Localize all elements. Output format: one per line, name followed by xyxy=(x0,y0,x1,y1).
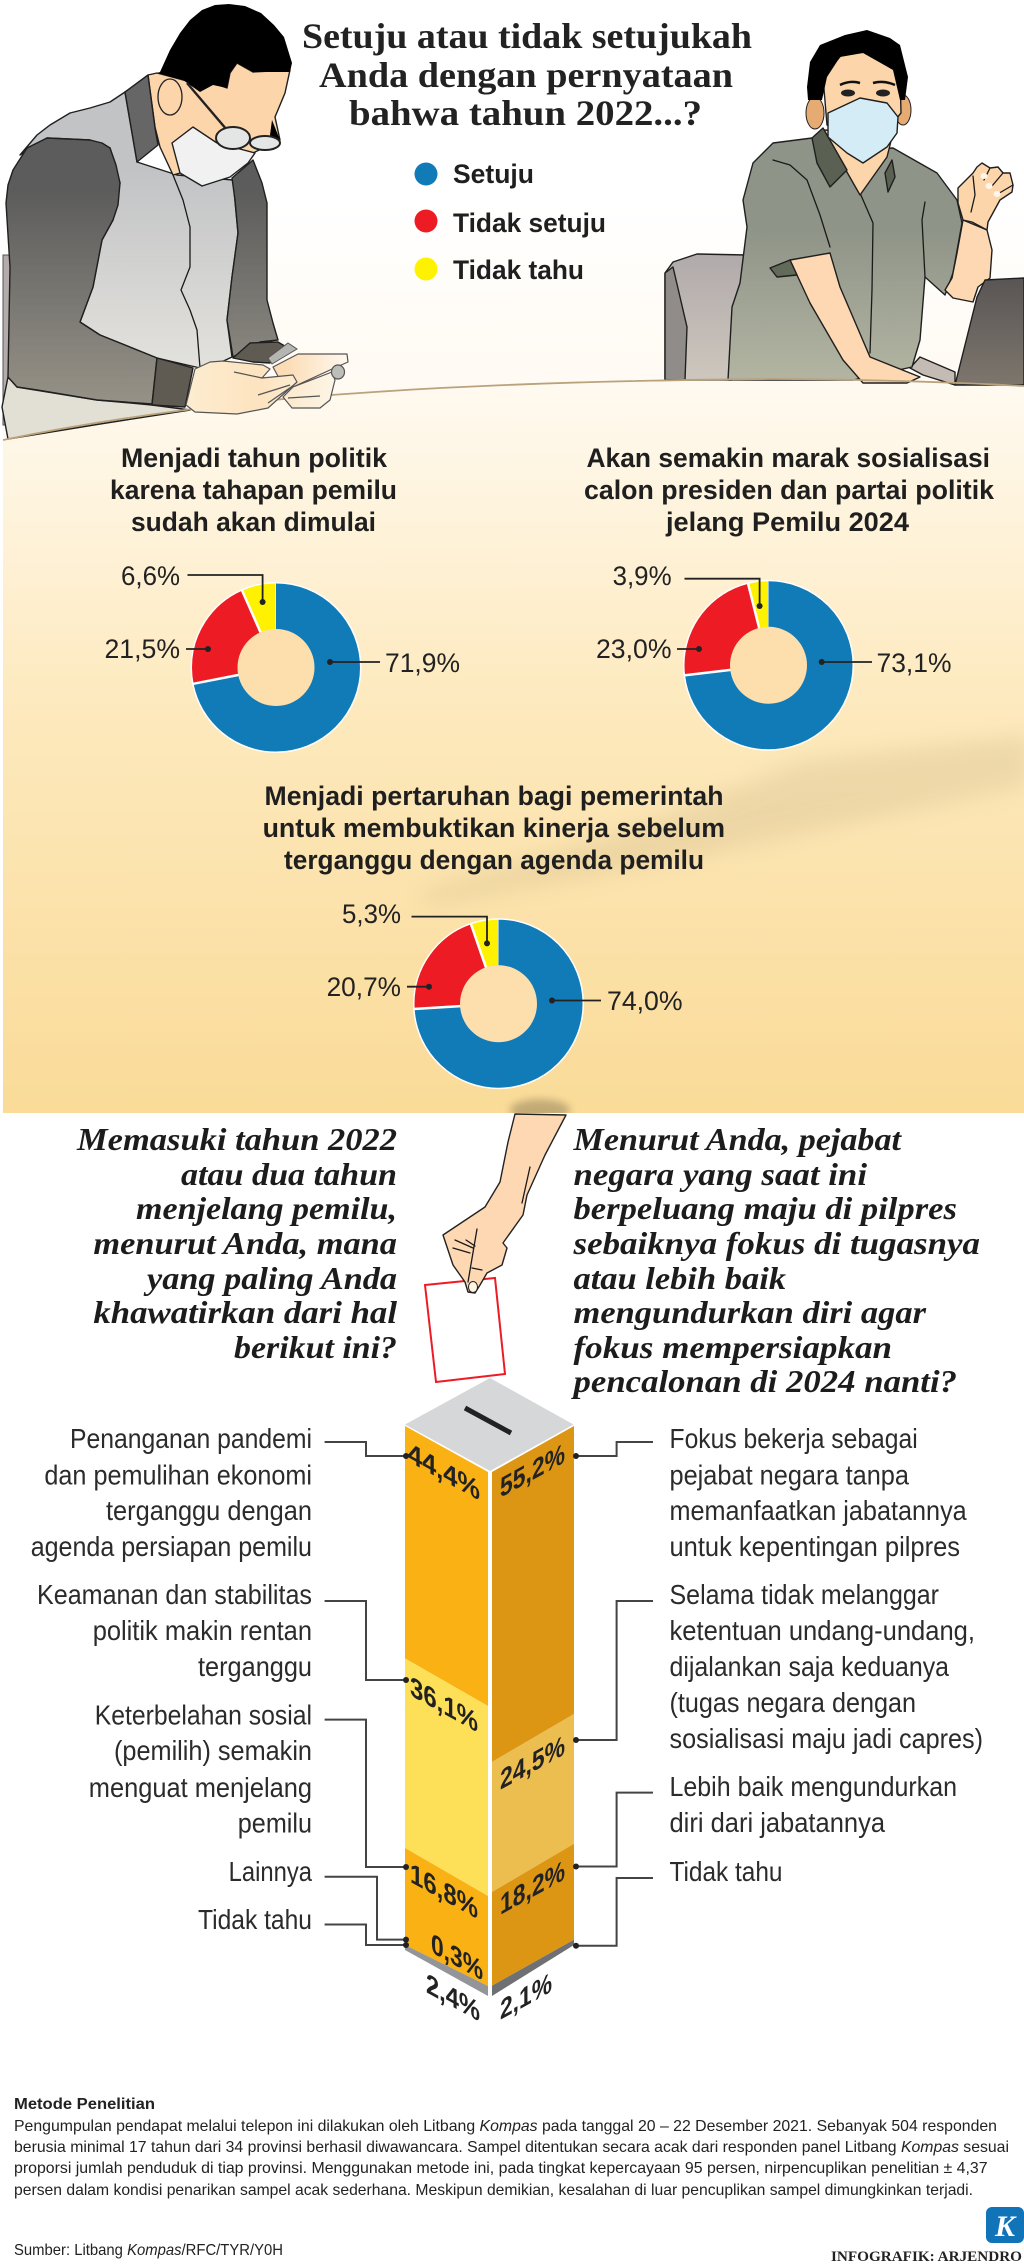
title: bahwa tahun 2022...? xyxy=(349,93,702,133)
labels right: Tidak tahu xyxy=(670,1856,782,1887)
method note: proporsi jumlah penduduk di tiap provinsi. Menggunakan metode ini, pada tingkat kepercayaan 95 persen, nirpencuplikan penelitian ± 4,37 xyxy=(14,2160,988,2177)
soft shadow across panel xyxy=(420,735,1024,1121)
donut chart 3: 5,3% xyxy=(342,899,401,929)
labels right: memanfaatkan jabatannya xyxy=(670,1495,967,1526)
percent labels: left face: 36,1% xyxy=(410,1671,478,1739)
vest xyxy=(20,92,238,368)
question left: Memasuki tahun 2022 xyxy=(76,1121,397,1157)
donut chart 3: 20,7% xyxy=(327,972,401,1002)
panel: donut 2 heading: Akan semakin marak sosialisasi xyxy=(586,443,990,473)
labels right: untuk kepentingan pilpres xyxy=(670,1531,960,1562)
mask xyxy=(828,98,898,163)
panel: donut 1 heading xyxy=(110,443,397,537)
labels left: terganggu dengan xyxy=(106,1495,312,1526)
labels right: Fokus bekerja sebagai xyxy=(670,1423,918,1454)
method note: Pengumpulan pendapat melalui telepon ini dilakukan oleh Litbang Kompas pada tanggal 20 – 22 Desember 2021. Sebanyak 504 responden xyxy=(14,2118,997,2135)
panel: donut 1 heading: karena tahapan pemilu xyxy=(110,475,397,505)
percent labels: right face: 24,5% xyxy=(500,1730,565,1797)
glasses xyxy=(187,83,280,150)
labels left: menguat menjelang xyxy=(89,1772,312,1803)
question left: berikut ini? xyxy=(234,1329,397,1365)
background panel xyxy=(3,0,1024,1113)
donut chart 3 xyxy=(327,899,683,1089)
collar xyxy=(125,75,158,162)
ears xyxy=(806,97,824,129)
collar xyxy=(812,128,895,192)
source: Sumber: Litbang Kompas/RFC/TYR/Y0H xyxy=(14,2242,283,2259)
dark front panel xyxy=(227,160,278,357)
panel: donut 1 heading: sudah akan dimulai xyxy=(131,507,376,537)
icon: hand holding ballot xyxy=(425,1114,566,1382)
question left: menjelang pemilu, xyxy=(136,1190,397,1226)
lower jacket xyxy=(2,377,190,439)
percent labels: left face: 2,4% xyxy=(426,1968,480,2028)
labels left: Penanganan pandemi xyxy=(70,1423,312,1454)
donut chart 3: 74,0% xyxy=(607,986,683,1016)
eyes and brows xyxy=(840,82,895,85)
percent labels: left face xyxy=(408,1437,483,2028)
percent labels: left face: 16,8% xyxy=(410,1857,478,1926)
logo: Kompas K xyxy=(986,2207,1024,2243)
percent labels: right face xyxy=(500,1438,565,2027)
donut chart 2: 3,9% xyxy=(613,561,672,591)
method note xyxy=(14,2096,1009,2199)
panel: donut 2 heading: jelang Pemilu 2024 xyxy=(665,507,909,537)
panel: donut 1 heading: Menjadi tahun politik xyxy=(121,443,388,473)
question right: atau lebih baik xyxy=(574,1260,786,1296)
question right: mengundurkan diri agar xyxy=(574,1294,927,1330)
question left: atau dua tahun xyxy=(181,1156,397,1192)
labels right: dijalankan saja keduanya xyxy=(670,1651,949,1682)
donut chart 1: 6,6% xyxy=(121,561,180,591)
question right xyxy=(570,1121,980,1399)
laptop base xyxy=(910,357,955,385)
hair xyxy=(157,4,292,145)
mask xyxy=(172,127,255,186)
illustration: masked man at table xyxy=(665,30,1024,385)
percent labels: right face: 18,2% xyxy=(500,1855,565,1922)
neck xyxy=(823,130,893,195)
fist xyxy=(958,163,1013,230)
panel: donut 3 heading xyxy=(263,781,725,875)
legend: Tidak tahu xyxy=(453,255,584,285)
chair xyxy=(665,254,747,380)
labels right: diri dari jabatannya xyxy=(670,1807,885,1838)
illustration: hands and phone xyxy=(186,354,348,414)
labels left: dan pemulihan ekonomi xyxy=(44,1460,312,1490)
ear xyxy=(158,79,182,115)
panel: donut 3 heading: Menjadi pertaruhan bagi pemerintah xyxy=(264,781,724,811)
legend: Setuju xyxy=(453,159,534,189)
question right: pencalonan di 2024 nanti? xyxy=(570,1363,957,1399)
labels right: pejabat negara tanpa xyxy=(670,1460,909,1490)
shirt seams xyxy=(773,160,925,353)
question left: yang paling Anda xyxy=(143,1260,397,1296)
question right: Menurut Anda, pejabat xyxy=(572,1121,902,1157)
legend xyxy=(414,159,606,285)
donut chart 1: 71,9% xyxy=(385,648,460,678)
labels right: Selama tidak melanggar xyxy=(670,1579,939,1610)
labels right: ketentuan undang-undang, xyxy=(670,1615,975,1646)
labels left: (pemilih) semakin xyxy=(114,1735,312,1766)
laptop xyxy=(955,278,1024,385)
percent labels: right face: 2,1% xyxy=(500,1967,552,2027)
title: Setuju atau tidak setujukah xyxy=(302,16,752,56)
question right: fokus mempersiapkan xyxy=(574,1329,892,1365)
labels left: Keamanan dan stabilitas xyxy=(37,1579,312,1610)
labels left: terganggu xyxy=(198,1651,312,1682)
logo: Kompas K: K xyxy=(994,2210,1017,2243)
question left: khawatirkan dari hal xyxy=(93,1294,397,1330)
method note: Metode Penelitian xyxy=(14,2096,155,2113)
labels left: Lainnya xyxy=(229,1856,312,1887)
shirt xyxy=(728,138,962,380)
method note: persen dalam kondisi penarikan sampel acak sederhana. Meskipun demikian, kesalahan di luar pencuplikan sampel dimungkinkan terjadi. xyxy=(14,2182,973,2199)
raised arm xyxy=(945,220,992,302)
donut chart 1: 21,5% xyxy=(104,634,180,664)
donut chart 2: 23,0% xyxy=(596,634,672,664)
illustration: man with phone xyxy=(2,4,297,439)
panel: donut 2 heading: calon presiden dan partai politik xyxy=(584,475,995,505)
percent labels: left face: 0,3% xyxy=(431,1928,483,1987)
skin: face and neck xyxy=(148,63,290,175)
credit: INFOGRAFIK: ARJENDRO xyxy=(831,2249,1022,2265)
labels left: politik makin rentan xyxy=(93,1615,312,1646)
vest front line xyxy=(173,175,200,368)
left arm xyxy=(790,253,920,383)
icon: ballot box xyxy=(405,1378,574,1996)
question left: menurut Anda, mana xyxy=(93,1225,397,1261)
question right: sebaiknya fokus di tugasnya xyxy=(572,1225,980,1261)
labels left xyxy=(31,1423,312,1935)
panel: donut 3 heading: terganggu dengan agenda pemilu xyxy=(284,845,704,875)
panel: donut 3 heading: untuk membuktikan kinerja sebelum xyxy=(263,813,725,843)
labels right: Lebih baik mengundurkan xyxy=(670,1771,957,1802)
labels left: Tidak tahu xyxy=(198,1904,312,1935)
chair edge xyxy=(3,255,12,425)
sleeve xyxy=(6,138,157,404)
donut chart 2 xyxy=(596,561,952,751)
hair xyxy=(807,30,908,100)
percent labels: right face: 55,2% xyxy=(500,1438,565,1505)
legend: Tidak setuju xyxy=(453,208,606,238)
question right: negara yang saat ini xyxy=(574,1156,867,1192)
labels left: pemilu xyxy=(238,1808,312,1839)
labels right: (tugas negara dengan xyxy=(670,1687,916,1718)
labels right: sosialisasi maju jadi capres) xyxy=(670,1723,983,1754)
donut chart 1 xyxy=(104,561,460,753)
title xyxy=(302,16,752,133)
connectors xyxy=(325,1442,653,1949)
labels right xyxy=(670,1423,983,1887)
donut chart 2: 73,1% xyxy=(876,648,952,678)
title: Anda dengan pernyataan xyxy=(319,55,733,95)
table edge xyxy=(3,379,1024,440)
watch xyxy=(268,343,297,364)
method note: berusia minimal 17 tahun dari 34 provinsi berhasil diwawancara. Sampel ditentukan secara acak dari responden panel Litbang Kompas sesuai xyxy=(14,2139,1009,2156)
wrist cuffs xyxy=(152,342,288,407)
panel: donut 2 heading xyxy=(584,443,995,537)
question left xyxy=(76,1121,397,1365)
question right: berpeluang maju di pilpres xyxy=(574,1190,957,1226)
face xyxy=(823,52,901,150)
labels left: Keterbelahan sosial xyxy=(95,1700,312,1730)
labels left: agenda persiapan pemilu xyxy=(31,1531,312,1562)
percent labels: left face: 44,4% xyxy=(408,1437,480,1507)
sleeve cuff xyxy=(770,260,797,277)
